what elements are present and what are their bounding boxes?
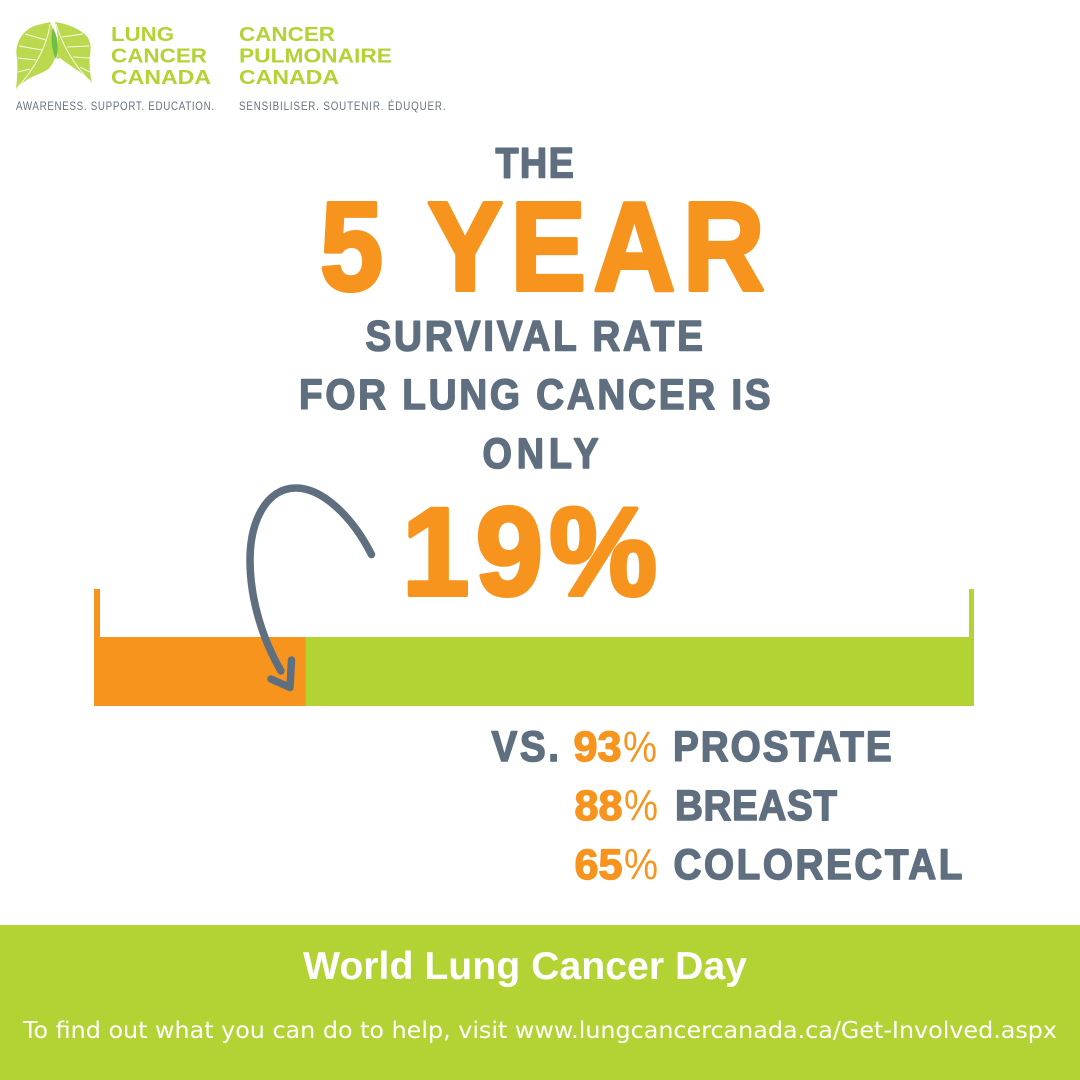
row: prostate (492, 722, 892, 772)
row: breast (574, 781, 837, 830)
logo: Lung Cancer Canada (16, 22, 446, 113)
row: prostate: PROSTATE (673, 722, 892, 770)
progress bar: 19 percent (94, 589, 974, 706)
row: prostate: % (623, 722, 657, 772)
heading: 5 YEAR: 5 YEAR (320, 176, 765, 317)
heading: SURVIVAL RATE: SURVIVAL RATE (366, 312, 703, 360)
row: breast: BREAST (675, 781, 837, 829)
row: prostate: VS. (492, 722, 559, 770)
logo tagline: English: AWARENESS. SUPPORT. EDUCATION. (16, 100, 214, 113)
bar remainder (305, 589, 974, 706)
statistic: 19%: 19% (402, 483, 657, 622)
logo text: English name (111, 23, 211, 89)
logo text: English name: CANCER (111, 44, 207, 68)
footer title: World Lung Cancer Day (303, 945, 747, 988)
logo text: French name: CANCER (239, 23, 335, 46)
logo text: French name: PULMONAIRE (239, 44, 392, 68)
row: breast: % (624, 781, 658, 830)
comparison list (492, 722, 962, 889)
bar filled portion (94, 589, 306, 706)
row: breast: 88 (574, 782, 622, 830)
footer call to action: To find out what you can do to help, visit www.lungcancercanada.ca/Get-Involved.aspx (22, 1016, 1057, 1044)
row: prostate: 93 (574, 723, 622, 771)
logo text: French name: CANADA (239, 66, 339, 89)
logo text: English name: CANADA (111, 66, 211, 89)
logo text: English name: LUNG (111, 23, 174, 46)
heading: THE: THE (496, 138, 574, 187)
arrow: curved pointer to bar (250, 488, 372, 688)
footer banner (0, 925, 1080, 1080)
heading: FOR LUNG CANCER IS: FOR LUNG CANCER IS (299, 370, 771, 418)
logo tagline: French: SENSIBILISER. SOUTENIR. ÉDUQUER. (239, 99, 446, 113)
logo text: French name (239, 23, 392, 89)
icon: two green leaves (16, 22, 92, 89)
heading: ONLY: ONLY (482, 429, 599, 478)
row: colorectal: 65 (574, 841, 622, 889)
row: colorectal: % (624, 840, 658, 889)
row: colorectal: COLORECTAL (674, 840, 962, 888)
